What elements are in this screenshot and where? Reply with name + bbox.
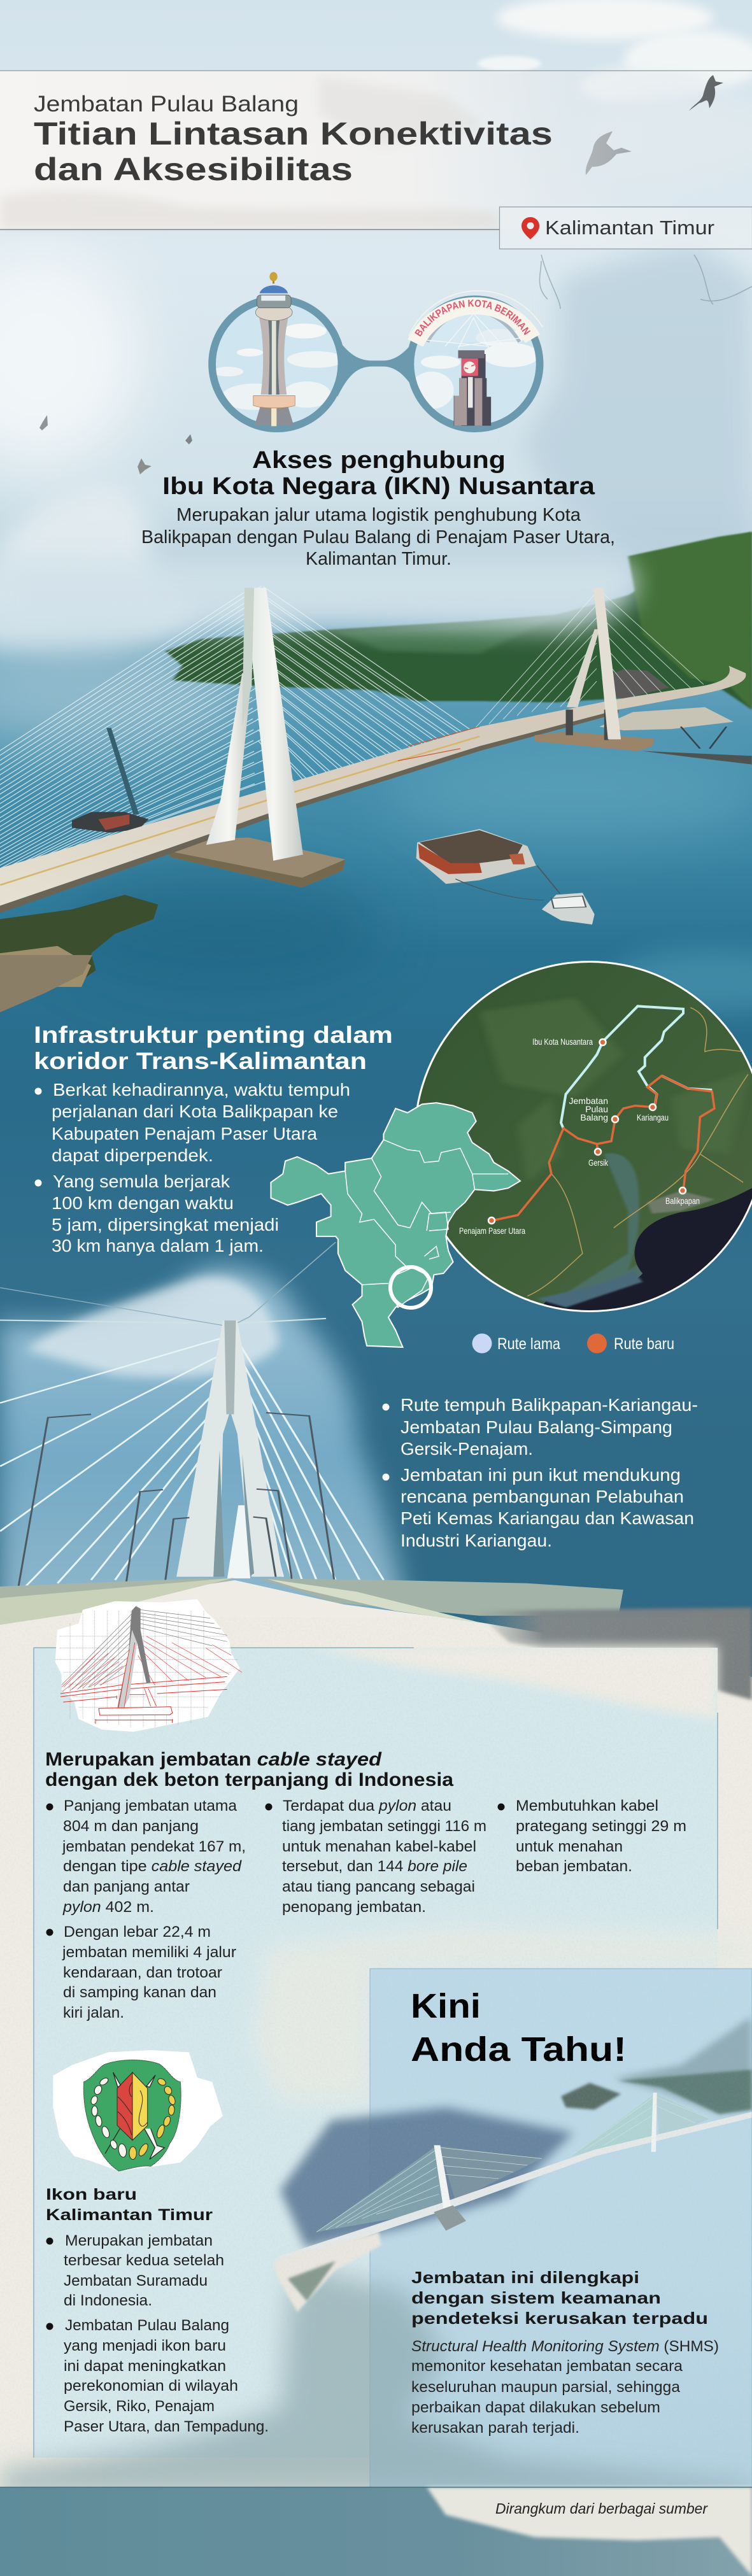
- map labels: Jembatan: [569, 1096, 608, 1106]
- column 2: untuk menahan kabel-kabel: [282, 1838, 476, 1855]
- arch: Balikpapan Kota Beriman: [408, 290, 543, 349]
- sky and clouds: [0, 1269, 408, 1617]
- column 3: prategang setinggi 29 m: [516, 1818, 686, 1835]
- panel heading: cable stayed: Merupakan jembatan cable stayed: [45, 1749, 382, 1770]
- bullets: perekonomian di wilayah: [64, 2377, 238, 2395]
- legend: [472, 1333, 674, 1354]
- panel heading: cable stayed: dengan dek beton terpanjang di Indonesia: [45, 1769, 453, 1790]
- section: akses penghubung: [141, 447, 615, 569]
- column 2: Terdapat dua pylon atau: [283, 1797, 451, 1815]
- estuary and sea: [568, 1152, 642, 1292]
- near shore island: [0, 895, 158, 987]
- bullet list: Kabupaten Penajam Paser Utara: [52, 1124, 317, 1143]
- body text: Structural Health Monitoring System (SHMS): [411, 2338, 719, 2355]
- column 1: kiri jalan.: [63, 2004, 124, 2021]
- icon: glasses with two landmarks: [208, 272, 544, 432]
- road railing left: [0, 1578, 235, 1614]
- description: Balikpapan dengan Pulau Balang di Penajam Paser Utara,: [141, 527, 615, 548]
- emblem: spear and kris: [105, 2072, 164, 2160]
- callout ring on map: [390, 1267, 431, 1308]
- right lens clouds: [410, 329, 539, 409]
- bridge pylon: [176, 1320, 283, 1577]
- body text: keseluruhan maupun parsial, sehingga: [411, 2379, 680, 2396]
- drawing: pylon: [118, 1606, 151, 1708]
- bullet list: 100 km dengan waktu: [52, 1193, 234, 1213]
- column 3: untuk menahan: [516, 1838, 623, 1855]
- left lens clouds: [213, 323, 344, 410]
- far land: [614, 2016, 752, 2114]
- subheading: Jembatan ini dilengkapi: [411, 2268, 639, 2287]
- lamp posts: [17, 1413, 336, 1596]
- water haze: [0, 637, 248, 751]
- birds: [39, 75, 723, 474]
- map labels: Balang: [580, 1112, 608, 1122]
- island bottom extension: [0, 955, 92, 1012]
- arch: Balikpapan Kota Beriman: BALIKPAPAN KOTA BERIMAN: [415, 299, 530, 337]
- column 1: dengan tipe cable stayed: [63, 1858, 242, 1875]
- admin boundaries: [527, 1008, 752, 1296]
- cables fan: [316, 2094, 709, 2232]
- drawing: pier: [99, 1707, 173, 1715]
- body text: perbaikan dapat dilakukan sebelum: [411, 2399, 660, 2416]
- pylon 1: [434, 2145, 453, 2219]
- text block: route: Rute tempuh Balikpapan-Kariangau-: [401, 1395, 698, 1415]
- main pier: [168, 837, 345, 888]
- glasses frame: [333, 333, 415, 397]
- subheading: pendeteksi kerusakan terpadu: [411, 2309, 708, 2328]
- heading: Ikon baru: [46, 2186, 137, 2204]
- map labels: Balikpapan: [665, 1196, 700, 1206]
- column 2: tersebut, dan 144 bore pile: [282, 1858, 467, 1875]
- top fog over hill: [0, 560, 636, 637]
- location tag: [499, 207, 752, 249]
- column 3: beban jembatan.: [516, 1858, 632, 1875]
- description: Kalimantan Timur.: [306, 549, 451, 569]
- column 1: jembatan memiliki 4 jalur: [62, 1944, 236, 1961]
- text block: route: Jembatan ini pun ikut mendukung: [401, 1465, 681, 1485]
- column 1: [46, 1797, 246, 2021]
- drawing: cables front red: [62, 1636, 242, 1692]
- section: sky view of bridge: [0, 1242, 623, 1617]
- heading line 1: Akses penghubung: [252, 447, 506, 474]
- bullets: Paser Utara, dan Tempadung.: [64, 2418, 269, 2435]
- icon: bridge engineering drawing: [55, 1599, 242, 1732]
- subheading: dengan sistem keamanan: [411, 2288, 661, 2307]
- barge: [416, 829, 536, 884]
- map: East Kalimantan regencies: [271, 1103, 520, 1347]
- bullets: Gersik, Riko, Penajam: [64, 2398, 215, 2415]
- location label: Kalimantan Timur: [545, 216, 714, 239]
- bullet list: perjalanan dari Kota Balikpapan ke: [52, 1101, 338, 1121]
- column 1: kendaraan, dan trotoar: [63, 1964, 222, 1981]
- panel: Kini Anda Tahu: Anda Tahu!: [411, 2030, 627, 2069]
- bridge deck: [278, 2112, 752, 2263]
- bullets: terbesar kedua setelah: [64, 2252, 224, 2269]
- cables: [0, 586, 473, 965]
- column 1: 804 m dan panjang: [63, 1818, 199, 1835]
- tow line: [455, 865, 560, 900]
- body text: memonitor kesehatan jembatan secara: [411, 2358, 683, 2375]
- map: satellite circle with routes: [408, 955, 752, 1324]
- forest patches: [479, 998, 752, 1182]
- pylon cables: [0, 1242, 383, 1593]
- bullet list: Berkat kehadirannya, waktu tempuh: [53, 1080, 350, 1100]
- Kini heading: Kini: [411, 1987, 481, 2025]
- pier: [434, 2205, 466, 2231]
- column 2: [265, 1797, 486, 1916]
- column 2: tiang jembatan setinggi 116 m: [282, 1818, 486, 1835]
- emblem: white and yellow drops: [90, 2077, 176, 2160]
- bullet list: dapat diperpendek.: [52, 1145, 213, 1165]
- text block: route: [382, 1395, 698, 1550]
- heading: Infrastruktur penting dalam: [34, 1022, 393, 1048]
- column 1: pylon 402 m.: [62, 1899, 154, 1916]
- column 3: [498, 1797, 686, 1875]
- paper background: [0, 1578, 752, 2576]
- section: ikon baru: Kalimantan Timur: [46, 2206, 213, 2224]
- panel: Kini Anda Tahu: [0, 1969, 752, 2496]
- panel heading: cable stayed: [45, 1749, 453, 1790]
- legend: Rute baru: [614, 1335, 674, 1353]
- section: ikon baru: [46, 2186, 269, 2435]
- road railing right: [259, 1578, 623, 1616]
- tug boat: [542, 893, 595, 924]
- bullets: Jembatan Pulau Balang: [65, 2317, 229, 2334]
- buildings on shore: [602, 669, 669, 698]
- icon: map pin: [521, 217, 539, 239]
- bullet list: 5 jam, dipersingkat menjadi: [52, 1215, 279, 1235]
- emblem of East Kalimantan: [53, 2050, 223, 2171]
- bullets: di Indonesia.: [64, 2292, 152, 2309]
- title: main line 1: Titian Lintasan Konektivitas: [34, 116, 553, 152]
- header panel: [0, 71, 752, 230]
- bullet list: 30 km hanya dalam 1 jam.: [52, 1236, 264, 1256]
- text block: route: rencana pembangunan Pelabuhan: [401, 1487, 684, 1506]
- column 1: di samping kanan dan: [63, 1984, 216, 2001]
- bullets: Jembatan Suramadu: [64, 2272, 208, 2289]
- body text: kerusakan parah terjadi.: [411, 2419, 579, 2437]
- drawing: cables rear: [62, 1610, 227, 1689]
- left pylon: [206, 588, 303, 861]
- section: trans-kalimantan text: [34, 1022, 393, 1256]
- map labels: Pulau: [585, 1104, 608, 1114]
- body text: [411, 2338, 719, 2437]
- text block: route: Jembatan Pulau Balang-Simpang: [401, 1417, 672, 1437]
- title: main line 2: dan Aksesibilitas: [34, 152, 353, 187]
- right tower: [454, 350, 491, 426]
- far pylon: [227, 1505, 250, 1578]
- drawing: deck red lines: [60, 1676, 227, 1723]
- column 2: penopang jembatan.: [282, 1899, 426, 1916]
- column 1: Panjang jembatan utama: [64, 1797, 237, 1815]
- bullets: yang menjadi ikon baru: [64, 2337, 226, 2354]
- photo: main bridge over water: [0, 532, 752, 1012]
- bullets: ini dapat meningkatkan: [64, 2358, 226, 2375]
- bullets: [46, 2232, 269, 2435]
- right pier and pylon: [535, 588, 655, 751]
- column 1: dan panjang antar: [63, 1878, 190, 1895]
- description: Merupakan jalur utama logistik penghubung Kota: [176, 505, 581, 525]
- panel: cable stayed facts: [34, 1646, 752, 2458]
- sky clouds and watercolor: [0, 0, 752, 656]
- legend: Rute lama: [497, 1335, 560, 1353]
- map labels: Ibu Kota Nusantara: [532, 1037, 593, 1047]
- map labels: [459, 1037, 700, 1236]
- map labels: Penajam Paser Utara: [459, 1226, 525, 1236]
- bullet list: [34, 1080, 350, 1256]
- subheading: [411, 2268, 708, 2328]
- paper grain texture: [0, 1617, 752, 2487]
- near shore: [273, 2232, 381, 2312]
- heading line 2: Ibu Kota Negara (IKN) Nusantara: [162, 473, 595, 500]
- column 1: jembatan pendekat 167 m,: [62, 1838, 246, 1855]
- background: sky to water gradient: [0, 0, 752, 1719]
- map labels: Gersik: [588, 1157, 609, 1168]
- forest hill: [166, 532, 752, 710]
- column 1: Dengan lebar 22,4 m: [64, 1923, 211, 1941]
- left tower: [253, 272, 295, 426]
- source credit: Dirangkum dari berbagai sumber: [495, 2500, 708, 2517]
- old route: [561, 1006, 712, 1128]
- map labels: Kariangau: [637, 1112, 669, 1122]
- title: kicker: Jembatan Pulau Balang: [34, 92, 299, 117]
- emblem: wooden shield: [117, 2072, 148, 2141]
- route nodes: [488, 1039, 686, 1224]
- road deck: [0, 666, 746, 906]
- far shore: [599, 707, 734, 730]
- bullet list: Yang semula berjarak: [53, 1171, 231, 1191]
- section: trans-kalimantan text: koridor Trans-Kalimantan: [34, 1048, 367, 1074]
- footer water band: [0, 2487, 752, 2576]
- column 2: atau tiang pancang sebagai: [282, 1878, 475, 1895]
- column 3: Membutuhkan kabel: [516, 1797, 658, 1815]
- text block: route: Peti Kemas Kariangau dan Kawasan: [401, 1508, 694, 1528]
- text block: route: Gersik-Penajam.: [401, 1439, 533, 1459]
- new route: [492, 1076, 714, 1221]
- bottom water fade: [0, 2267, 752, 2496]
- description: [141, 505, 615, 569]
- crane and work boat: [72, 728, 148, 833]
- text block: route: Industri Kariangau.: [401, 1531, 552, 1550]
- bullets: Merupakan jembatan: [65, 2232, 213, 2249]
- pylon 2: [651, 2093, 657, 2152]
